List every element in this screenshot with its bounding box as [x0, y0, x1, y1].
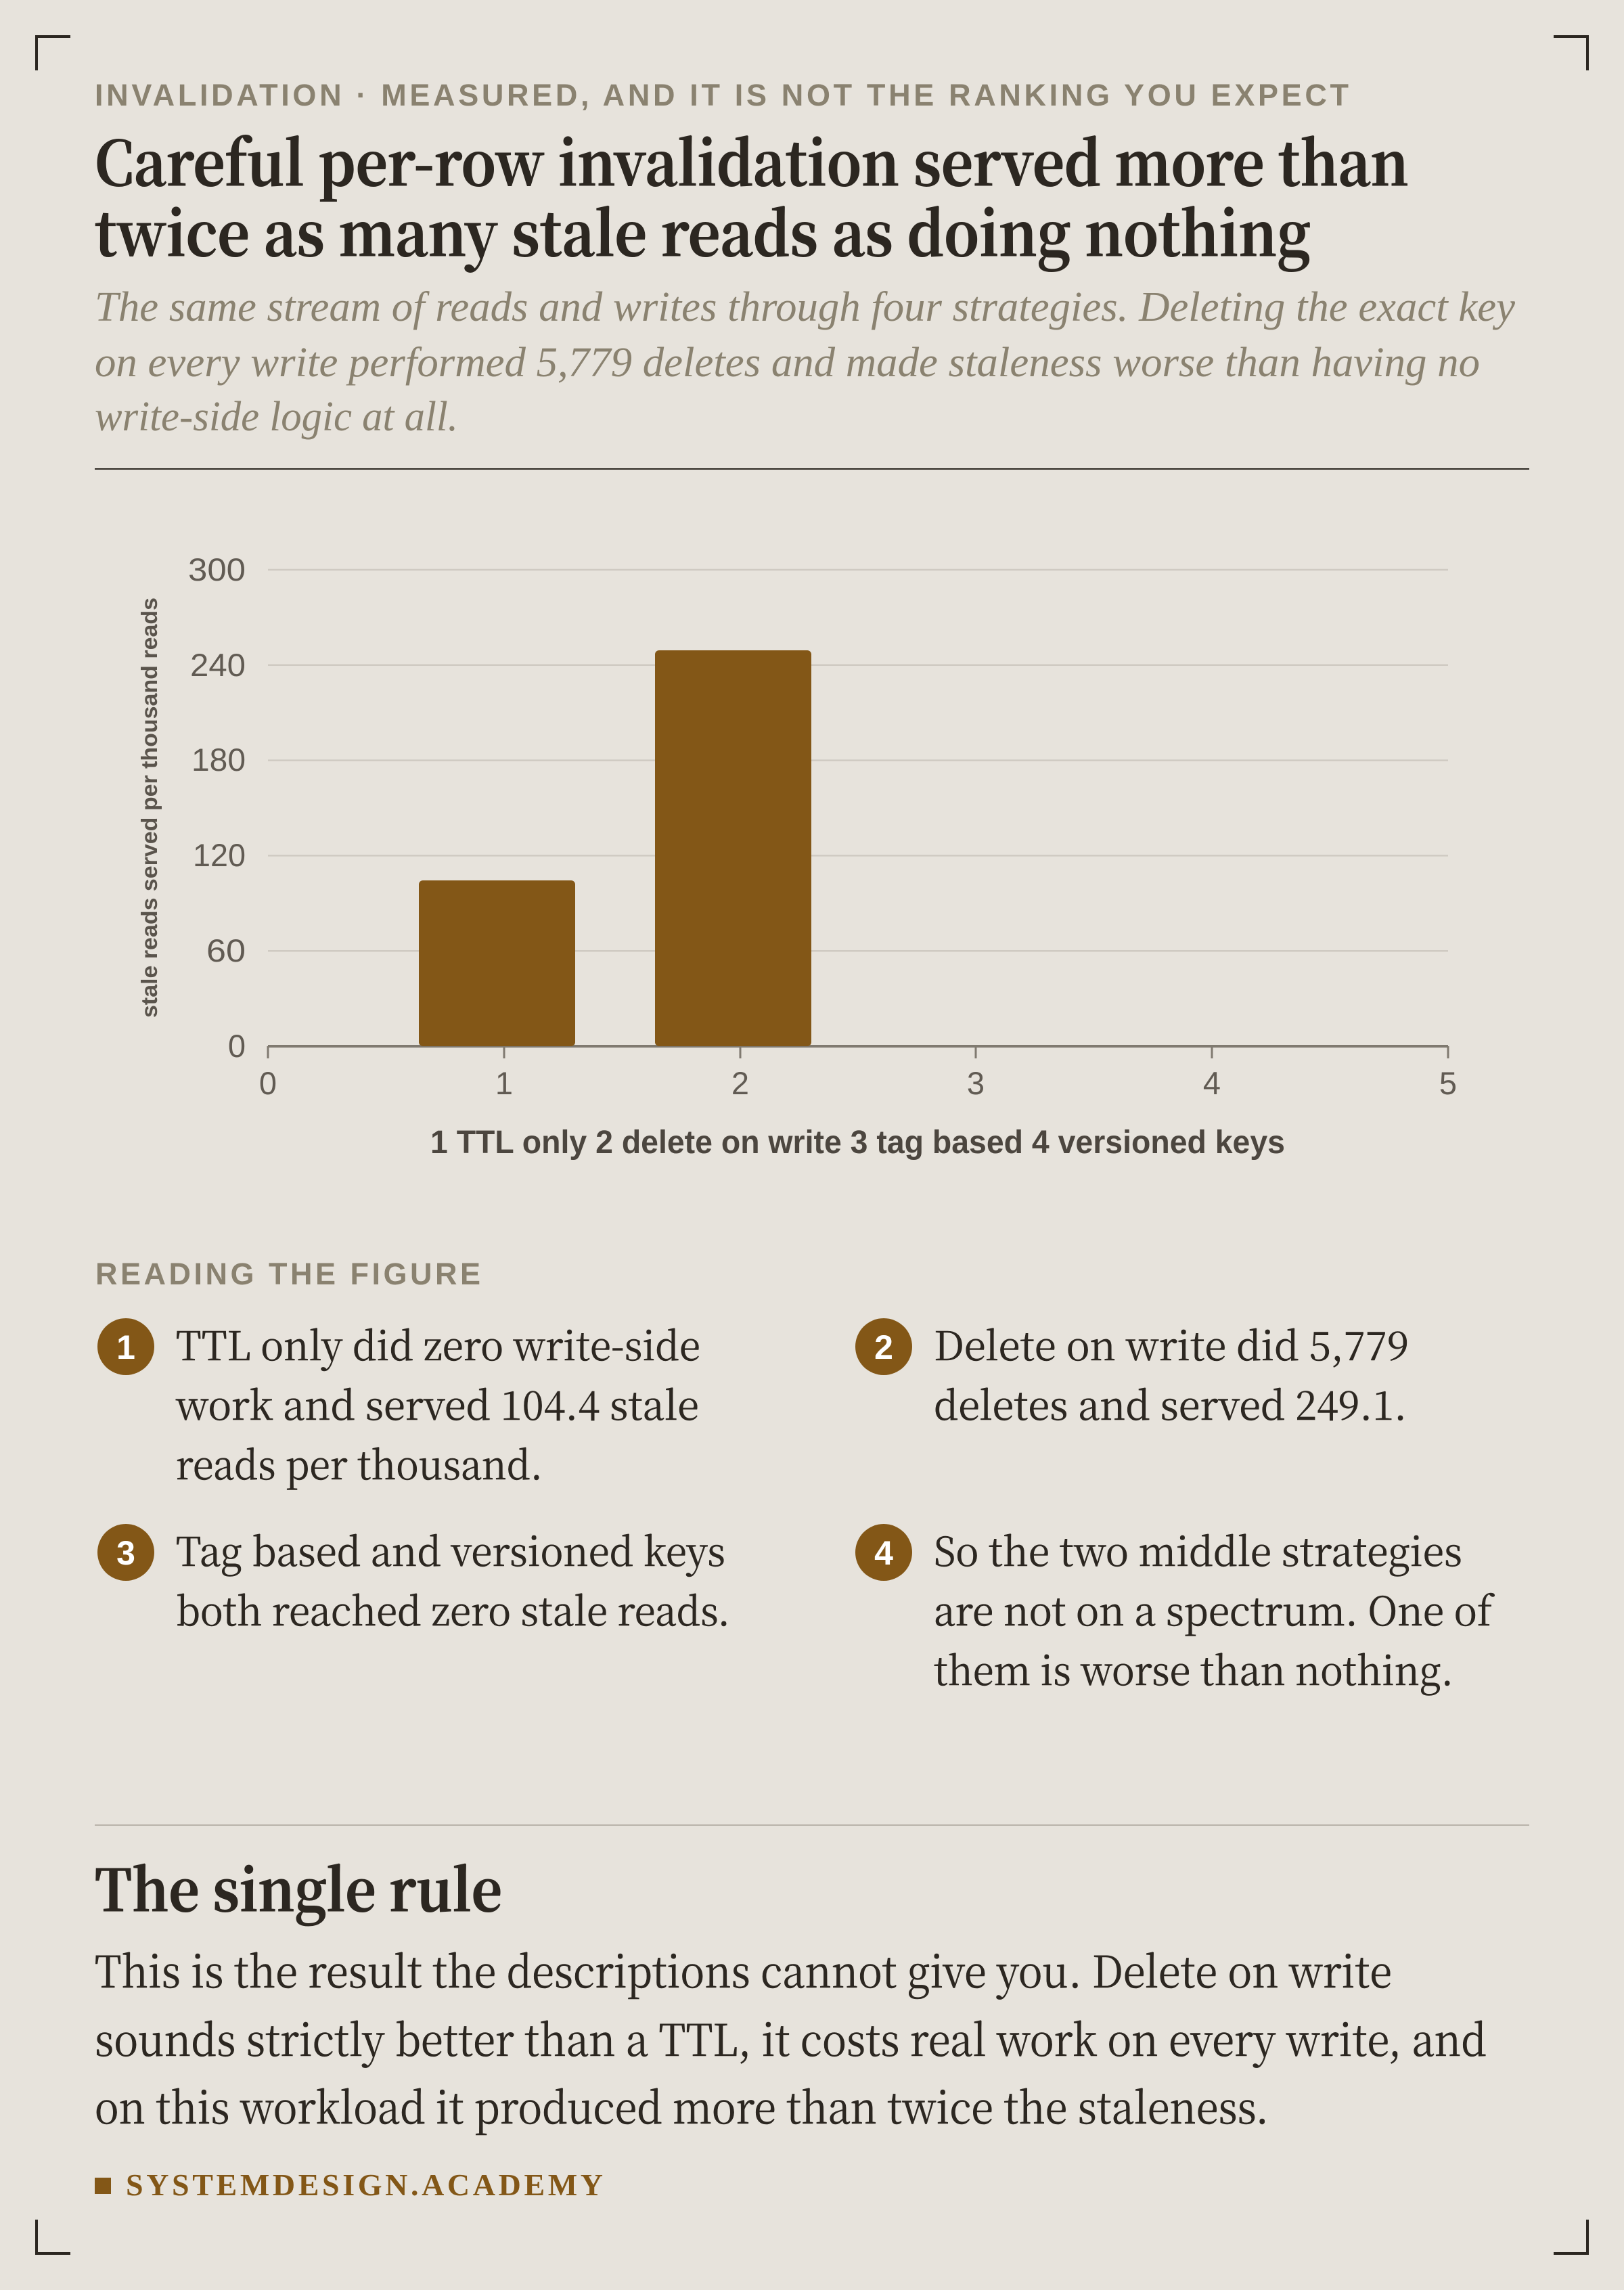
- note 3: both reached zero stale reads.: [176, 1579, 730, 1637]
- note 4: [855, 1520, 1495, 1697]
- note 1: 1: [116, 1328, 135, 1366]
- note 2: 2: [874, 1328, 893, 1366]
- note 3: 3: [116, 1534, 135, 1572]
- note 4: are not on a spectrum. One of: [934, 1579, 1495, 1637]
- y axis title: stale reads served per thousand reads: [137, 598, 162, 1018]
- title: twice as many stale reads as doing nothing: [95, 185, 1311, 273]
- heading: the single rule: The single rule: [95, 1845, 502, 1928]
- note 4: So the two middle strategies: [934, 1520, 1462, 1577]
- x axis tick labels: 1: [495, 1065, 513, 1101]
- rule body text: [95, 1937, 1487, 2136]
- note 1: TTL only did zero write-side: [176, 1314, 700, 1372]
- y axis tick labels: 60: [206, 933, 246, 968]
- section heading: reading the figure: READING THE FIGURE: [95, 1257, 480, 1291]
- x axis title: 1 TTL only 2 delete on write 3 tag based 4 versioned keys: [430, 1125, 1285, 1161]
- subtitle: on every write performed 5,779 deletes and made staleness worse than having no: [95, 340, 1480, 386]
- note 3: [97, 1520, 730, 1637]
- x axis tick labels: 5: [1439, 1065, 1457, 1101]
- subtitle: The same stream of reads and writes through four strategies. Deleting the exact key: [95, 284, 1515, 330]
- eyebrow: INVALIDATION · MEASURED, AND IT IS NOT THE RANKING YOU EXPECT: [95, 78, 1349, 112]
- y axis tick labels: 0: [228, 1028, 246, 1064]
- y axis tick labels: 240: [190, 647, 246, 683]
- y axis tick labels: [188, 552, 246, 1064]
- note 2: deletes and served 249.1.: [934, 1374, 1407, 1431]
- y axis tick labels: 120: [193, 837, 246, 873]
- x axis tick labels: 2: [731, 1065, 749, 1101]
- bars: [419, 650, 811, 1046]
- x axis tick labels: 0: [259, 1065, 277, 1101]
- rule body text: sounds strictly better than a TTL, it costs real work on every write, and: [95, 2005, 1487, 2069]
- note 2: [855, 1314, 1409, 1431]
- title: Careful per-row invalidation served more than: [95, 115, 1409, 203]
- note 4: them is worse than nothing.: [934, 1639, 1453, 1697]
- rule body text: This is the result the descriptions cannot give you. Delete on write: [95, 1937, 1392, 2000]
- note 1: reads per thousand.: [176, 1433, 543, 1491]
- note 3: Tag based and versioned keys: [176, 1520, 725, 1577]
- note 4: 4: [874, 1534, 893, 1572]
- brand footer: SYSTEMDESIGN.ACADEMY: [126, 2168, 603, 2202]
- y axis tick labels: 180: [191, 742, 246, 778]
- title: [95, 115, 1409, 273]
- bar chart: [137, 552, 1457, 1161]
- note 1: work and served 104.4 stale: [175, 1374, 699, 1431]
- x axis tick labels: 4: [1203, 1065, 1221, 1101]
- note 1: [97, 1314, 700, 1491]
- subtitle: [95, 284, 1515, 440]
- x axis: [268, 1046, 1448, 1058]
- x axis tick labels: [259, 1065, 1457, 1101]
- note 2: Delete on write did 5,779: [934, 1314, 1409, 1372]
- rule body text: on this workload it produced more than twice the staleness.: [95, 2073, 1269, 2136]
- x axis tick labels: 3: [967, 1065, 985, 1101]
- subtitle: write-side logic at all.: [95, 394, 458, 440]
- y axis tick labels: 300: [188, 552, 246, 587]
